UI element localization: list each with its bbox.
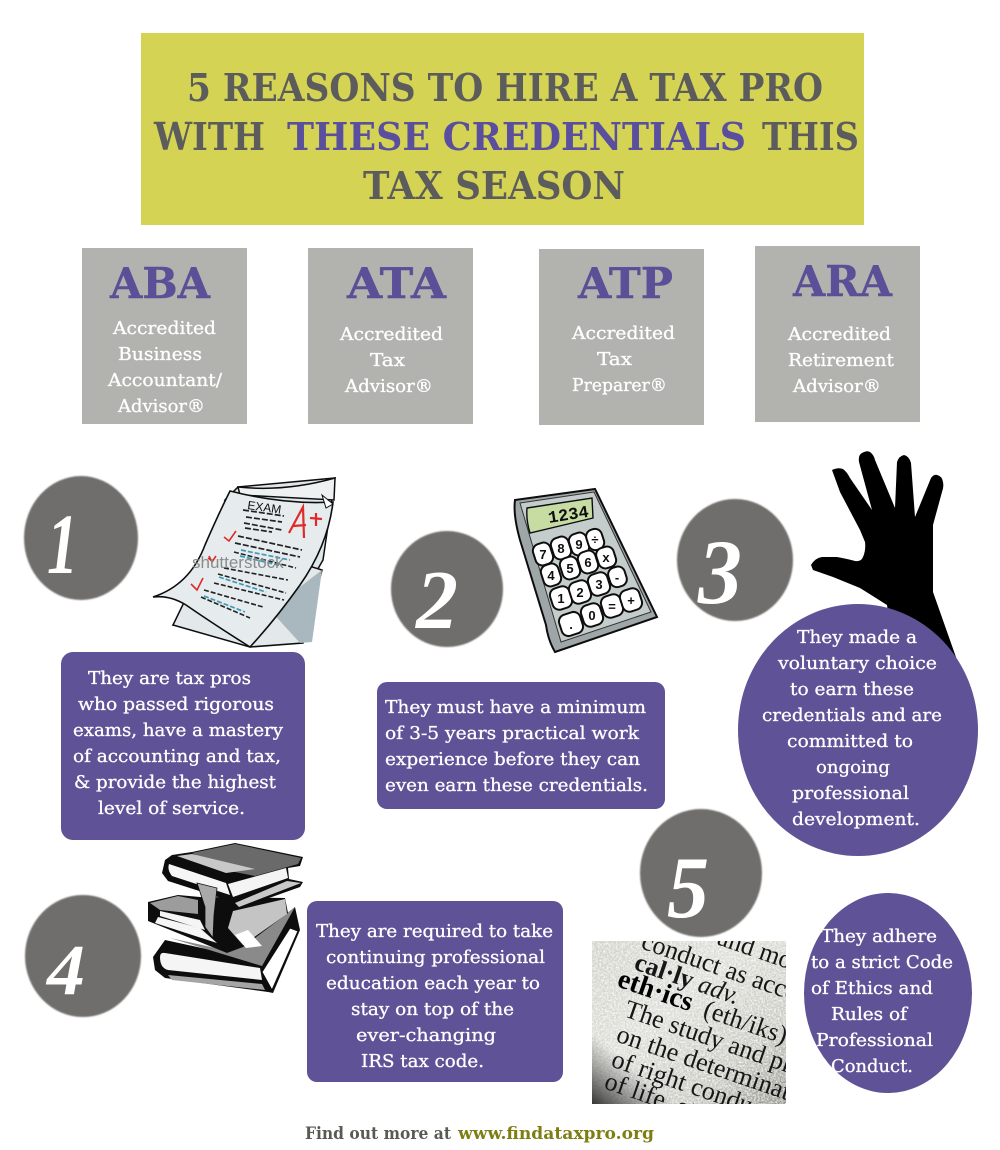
panel: ARA credential: Advisor® xyxy=(792,376,881,397)
photo: dictionary ethics entry: The study and philosophy xyxy=(621,994,885,1109)
panel: ATP credential: ATP xyxy=(577,259,673,308)
title banner: TAX SEASON xyxy=(363,163,625,208)
middle book xyxy=(148,895,288,953)
callout: reason 1: level of service. xyxy=(98,798,245,819)
footer link line: www.findataxpro.org xyxy=(457,1124,654,1144)
title banner: THIS xyxy=(762,114,859,159)
icon: calculator: = xyxy=(608,599,616,614)
icon: calculator: 8 xyxy=(557,541,565,556)
callout: reason 2 xyxy=(377,682,665,809)
panel: ATA credential: Advisor® xyxy=(344,376,433,397)
panel: ABA credential: Advisor® xyxy=(117,396,205,417)
callout: reason 1: They are tax pros xyxy=(88,668,251,689)
callout: reason 4: IRS tax code. xyxy=(361,1051,484,1072)
callout: reason 1 xyxy=(61,652,305,840)
photo: dictionary ethics entry: eth·ics xyxy=(614,963,697,1018)
number badge 3 xyxy=(677,499,793,623)
title banner: WITH xyxy=(153,114,265,159)
footer link line xyxy=(305,1124,654,1144)
icon: calculator: . xyxy=(569,617,573,632)
callout: reason 5: They adhere xyxy=(821,926,937,947)
callout: reason 3: development. xyxy=(792,809,920,830)
callout: reason 2: even earn these credentials. xyxy=(385,775,648,796)
callout: reason 3: to earn these xyxy=(790,679,914,700)
callout: reason 3: professional xyxy=(792,783,909,804)
icon: exam papers xyxy=(153,478,335,647)
callout: reason 4: continuing professional xyxy=(326,947,545,968)
icon: calculator: - xyxy=(615,570,619,585)
top book xyxy=(162,843,303,909)
callout: reason 3: committed to xyxy=(787,731,913,752)
callout: reason 5: Professional xyxy=(816,1030,933,1051)
icon: calculator: 5 xyxy=(566,561,574,576)
photo: dictionary ethics entry xyxy=(592,941,786,1104)
number badge 4: 4 xyxy=(45,930,85,1010)
callout: reason 5: of Ethics and xyxy=(811,978,933,999)
number badge 3: 3 xyxy=(697,521,742,623)
photo: dictionary ethics entry: of right conduct xyxy=(608,1044,775,1126)
photo: dictionary ethics entry: on the determination xyxy=(613,1019,826,1117)
photo: dictionary ethics entry: and moral xyxy=(714,922,822,984)
icon: raised hand silhouette xyxy=(811,451,957,660)
photo: dictionary ethics entry: cal·ly adv. xyxy=(631,947,744,1010)
number badge 1: 1 xyxy=(47,496,78,592)
callout: reason 4 xyxy=(307,901,563,1082)
panel: ATA credential: Tax xyxy=(370,350,405,371)
photo: dictionary ethics entry: conduct as accepted xyxy=(638,926,844,1021)
callout: reason 3: ongoing xyxy=(816,757,890,778)
callout: reason 1: exams, have a mastery xyxy=(73,720,284,741)
number badge 1 xyxy=(24,476,138,600)
title banner xyxy=(141,33,864,225)
panel: ATA credential: Accredited xyxy=(339,324,443,345)
callout: reason 5: to a strict Code xyxy=(811,952,953,973)
panel: ATA credential xyxy=(308,248,473,424)
callout: reason 2: They must have a minimum xyxy=(385,697,646,718)
panel: ABA credential: ABA xyxy=(109,259,211,308)
number badge 5: 5 xyxy=(667,840,709,937)
callout: reason 5: Conduct. xyxy=(831,1056,913,1077)
title banner: 5 REASONS TO HIRE A TAX PRO xyxy=(187,65,823,110)
icon: calculator: ÷ xyxy=(591,532,599,547)
bottom book xyxy=(153,907,300,993)
panel: ATP credential xyxy=(539,249,704,425)
callout: reason 1: & provide the highest xyxy=(74,772,277,793)
icon: calculator: 6 xyxy=(584,555,592,570)
icon: calculator: 2 xyxy=(576,585,584,600)
number badge 4 xyxy=(25,895,141,1017)
icon: calculator: 3 xyxy=(595,577,603,592)
callout: reason 4: ever-changing xyxy=(356,1025,496,1046)
panel: ABA credential: Accountant/ xyxy=(107,370,223,391)
panel: ATA credential: ATA xyxy=(346,259,448,308)
callout: reason 4: education each year to xyxy=(326,973,540,994)
icon: calculator: + xyxy=(627,593,635,608)
panel: ABA credential: Business xyxy=(118,344,202,365)
number badge 2: 2 xyxy=(414,554,458,647)
callout: reason 3: voluntary choice xyxy=(777,653,937,674)
icon: calculator: 9 xyxy=(575,537,583,552)
panel: ABA credential: Accredited xyxy=(112,318,216,339)
panel: ARA credential: Accredited xyxy=(787,324,891,345)
title banner: THESE CREDENTIALS xyxy=(287,114,746,159)
callout: reason 4: stay on top of the xyxy=(351,999,514,1020)
footer link line: Find out more at xyxy=(305,1124,451,1144)
number badge 2 xyxy=(391,531,503,647)
panel: ARA credential: ARA xyxy=(792,257,893,306)
panel: ATP credential: Accredited xyxy=(571,323,675,344)
icon: calculator: 1 xyxy=(557,591,565,606)
callout: reason 2: of 3-5 years practical work xyxy=(385,723,640,744)
callout: reason 1: who passed rigorous xyxy=(78,694,274,715)
panel: ATP credential: Preparer® xyxy=(572,375,667,396)
callout: reason 5: Rules of xyxy=(831,1004,908,1025)
callout: reason 3 xyxy=(738,604,978,856)
callout: reason 4: They are required to take xyxy=(316,921,553,942)
panel: ABA credential xyxy=(82,248,247,424)
callout: reason 3: They made a xyxy=(797,627,917,648)
icon: calculator: x xyxy=(602,550,610,565)
photo: dictionary ethics entry: of life, etc. xyxy=(601,1066,717,1130)
icon: exam papers: shutterstock xyxy=(192,553,284,572)
icon: calculator: 0 xyxy=(588,608,596,623)
callout: reason 2: experience before they can xyxy=(385,749,640,770)
icon: calculator xyxy=(515,489,657,652)
panel: ATP credential: Tax xyxy=(597,349,632,370)
icon: calculator: 7 xyxy=(539,547,547,562)
icon: calculator: 1234 xyxy=(547,504,590,529)
bookmark xyxy=(197,883,217,938)
panel: ARA credential: Retirement xyxy=(788,350,895,371)
callout: reason 1: of accounting and tax, xyxy=(73,746,281,767)
callout: reason 5 xyxy=(804,893,972,1093)
photo: dictionary ethics entry: (eth/iks) xyxy=(700,994,791,1050)
icon: stack of books xyxy=(148,843,303,993)
callout: reason 3: credentials and are xyxy=(762,705,942,726)
panel: ARA credential xyxy=(755,246,920,422)
icon: exam papers: EXAM xyxy=(247,498,282,517)
number badge 5 xyxy=(640,809,762,937)
icon: calculator: 4 xyxy=(547,568,555,583)
